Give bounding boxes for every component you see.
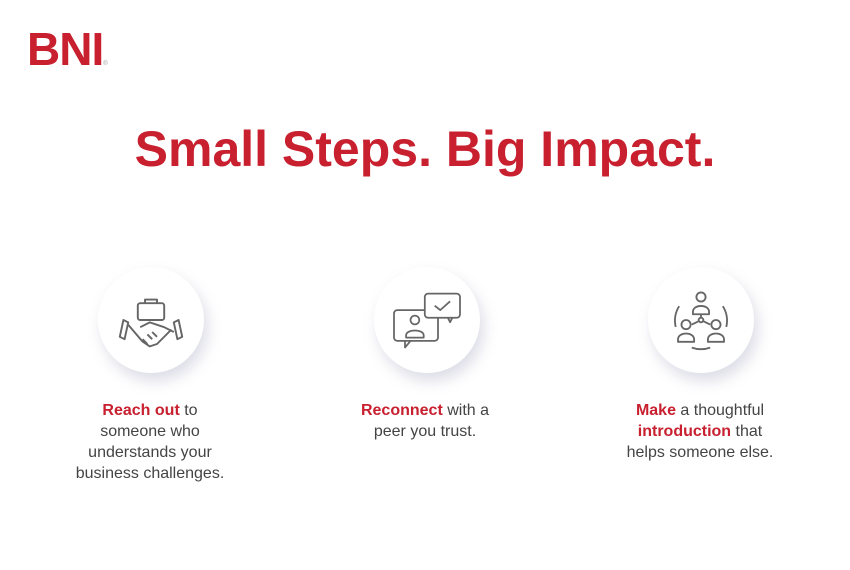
text: reconnect: Reconnect with a [361,402,489,419]
text: make [627,402,773,461]
title: Small Steps. Big Impact. [135,121,715,177]
logo: BNI® [27,23,107,75]
text: reconnect: peer you trust. [374,423,476,440]
text: make: Make a thoughtful [636,402,764,419]
text: make: helps someone else. [627,444,773,461]
text: reach out: Reach out to [102,402,198,419]
icon: handshake [98,267,204,373]
icon: chat [374,267,480,373]
text: reach out: someone who [100,423,200,440]
text: reconnect [361,402,490,440]
text: reach out: understands your [88,444,212,461]
icon: network [648,267,754,373]
text: reach out [76,402,224,482]
text: make: introduction that [638,423,762,440]
text: reach out: business challenges. [76,465,224,482]
